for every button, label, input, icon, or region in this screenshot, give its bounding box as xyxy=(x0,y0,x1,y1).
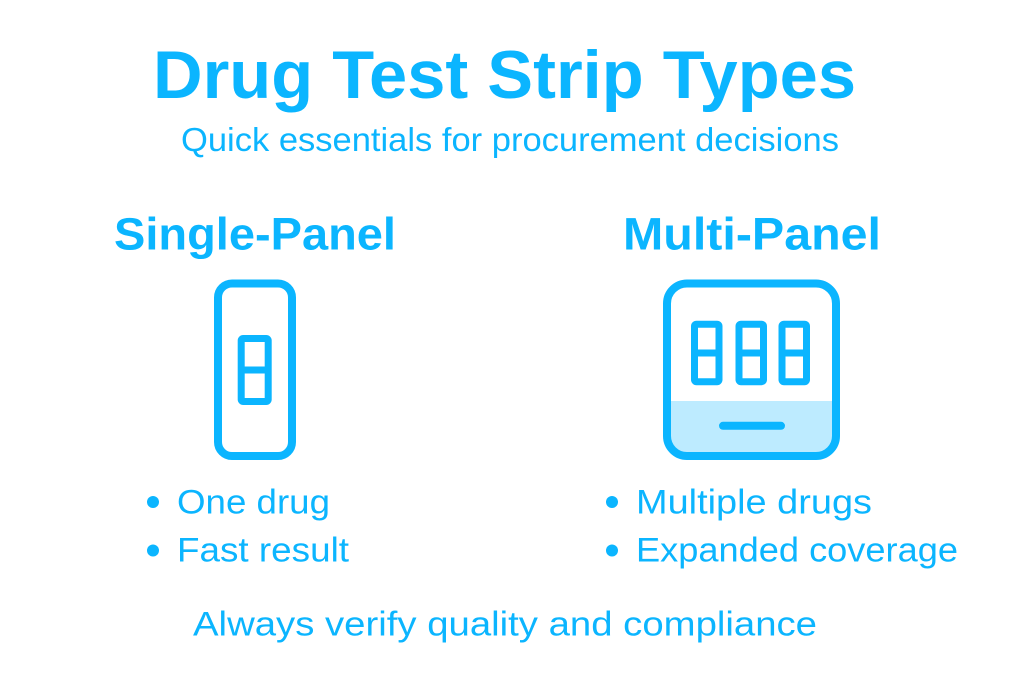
panel: single-panel xyxy=(114,208,396,570)
heading: multi-panel: Multi-Panel xyxy=(623,208,881,260)
bullet list: single-panel xyxy=(147,483,349,570)
bullet list: multi-panel xyxy=(606,483,958,570)
heading: single-panel: Single-Panel xyxy=(114,208,396,260)
bullet list: multi-panel: Multiple drugs xyxy=(636,483,872,521)
footer note: Always verify quality and compliance xyxy=(193,606,817,644)
icon: multi-panel cassette xyxy=(667,284,836,456)
bullet list: single-panel: One drug xyxy=(177,483,330,521)
panel: multi-panel xyxy=(606,208,958,570)
subtitle: Quick essentials for procurement decisions xyxy=(181,121,839,158)
bullet list: single-panel: Fast result xyxy=(177,532,349,570)
bullet list: multi-panel: Expanded coverage xyxy=(636,532,958,570)
icon: single-panel strip xyxy=(218,284,292,456)
title: Drug Test Strip Types xyxy=(153,37,856,113)
